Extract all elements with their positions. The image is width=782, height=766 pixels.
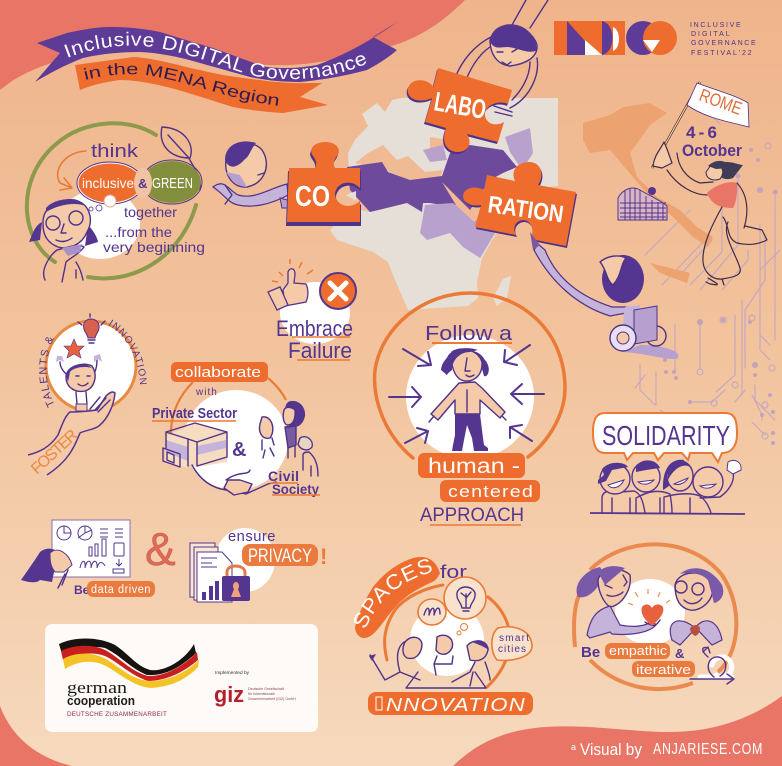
event dates — [682, 123, 742, 160]
icon: documents with bar chart — [190, 543, 232, 602]
event dates: 4-6 — [686, 123, 717, 142]
bubble: smart cities — [492, 627, 532, 660]
credit line: a — [571, 742, 576, 752]
label: iterative: iterative — [636, 663, 691, 677]
venn: green — [142, 160, 202, 204]
label: human-: human - — [428, 455, 520, 478]
person — [429, 348, 506, 451]
text: Failure: Failure — [288, 338, 352, 363]
icon: leaf — [161, 127, 200, 190]
puzzle piece: LABO — [407, 68, 512, 154]
Rome marker — [648, 187, 656, 195]
text: ensure: ensure — [228, 528, 276, 545]
label: data driven: data driven — [91, 584, 151, 596]
label: privacy: PRIVACY — [248, 546, 312, 567]
right person with glasses — [670, 568, 723, 645]
orange ring — [574, 544, 736, 689]
thought bubbles — [89, 195, 116, 211]
coral corner: bottom left — [0, 706, 72, 766]
venn: green: GREEN — [152, 175, 193, 192]
orange ring — [375, 293, 565, 458]
white blob — [615, 579, 685, 645]
giz logo: giz — [214, 682, 244, 707]
white blob — [406, 335, 534, 459]
icon: thumbs up — [268, 259, 313, 310]
speech bubble: SOLIDARITY — [602, 420, 730, 451]
character with raised arms — [56, 354, 102, 411]
speech bubble — [593, 413, 737, 462]
Rome event callout — [618, 82, 767, 285]
text: ampersand: & — [232, 439, 246, 461]
german flag ribbon — [59, 638, 199, 688]
bubble: smart cities: cities — [498, 644, 526, 655]
event dates: October — [682, 141, 742, 160]
title banner — [35, 22, 397, 113]
woman carrying the flag — [653, 142, 767, 285]
dashboard board — [52, 520, 130, 577]
puzzle collaboration — [213, 0, 678, 359]
character with glasses — [29, 199, 98, 282]
be data driven section — [21, 520, 327, 602]
text: Embrace: Embrace — [276, 316, 353, 341]
circuit board pattern — [635, 94, 780, 445]
icon: handshake — [192, 465, 276, 495]
think inclusive and green section — [27, 123, 205, 282]
text: civil society — [268, 468, 320, 497]
person holding LABO piece — [455, 0, 548, 116]
text: foster: FOSTER — [28, 426, 82, 478]
orange ring with white fill — [46, 321, 136, 411]
text: follow a: Follow a — [425, 323, 513, 345]
person pushing CO piece — [213, 141, 298, 208]
logo text: DIGITAL — [691, 31, 731, 38]
banner: orange lower ribbon — [75, 57, 328, 113]
label: centered: centered — [448, 482, 534, 501]
icon: iteration loop arrow — [690, 647, 734, 684]
arrow from think — [58, 151, 86, 190]
green circle — [27, 123, 196, 278]
map of Italy — [583, 103, 713, 283]
label: collaborate: collaborate — [175, 364, 261, 381]
logo text — [690, 22, 757, 57]
puzzle piece: RATION — [463, 162, 577, 248]
Follow a human-centered approach — [375, 293, 565, 526]
partner logos card — [45, 624, 318, 732]
text: talents and: TALENTS & — [39, 337, 54, 408]
text: private sector: Private Sector — [152, 405, 237, 422]
label: iterative — [632, 661, 695, 677]
coral corner: top left — [0, 0, 465, 90]
label: collaborate — [171, 362, 268, 382]
venn: inclusive: inclusive — [82, 175, 134, 191]
coral corner: bottom right — [453, 696, 782, 766]
group of four people — [598, 460, 741, 513]
banner: purple upper ribbon — [35, 22, 397, 82]
giz full name: für Internationale — [248, 692, 275, 696]
giz full name: Zusammenarbeit (GIZ) GmbH — [248, 697, 296, 701]
white blob — [280, 282, 350, 344]
icon: Colosseum — [618, 188, 667, 220]
civil society people — [259, 401, 318, 476]
icon: padlock — [222, 566, 250, 601]
credit line: Visual by — [580, 740, 642, 759]
puzzle piece: LABO: LABO — [432, 86, 488, 125]
person in purple — [21, 549, 72, 588]
bubble: smart cities: smart — [499, 633, 529, 644]
label: centered — [440, 480, 540, 502]
label: empathic: empathic — [609, 644, 667, 658]
Embrace Failure section — [268, 259, 356, 363]
label: empathic — [605, 643, 670, 659]
puzzle piece: RATION: RATION — [486, 191, 565, 229]
label: spaces: SPACES — [354, 559, 432, 628]
credit line — [571, 740, 763, 759]
text: innovation: INNOVATION — [108, 320, 147, 384]
text: be: Be — [74, 583, 90, 597]
bubble: lightbulb — [444, 577, 486, 635]
giz full name: Deutsche Gesellschaft — [248, 687, 284, 691]
open hand — [28, 392, 115, 475]
icon: star — [64, 339, 84, 358]
label: innovation: NNOVATION — [386, 695, 526, 715]
white blob — [60, 189, 140, 259]
connecting arcs — [171, 378, 286, 450]
bubble: scribble — [418, 599, 446, 625]
giz full name — [248, 687, 296, 701]
venn: ampersand: & — [138, 176, 147, 191]
text: for: for — [440, 562, 467, 582]
text: civil society: Society — [272, 481, 319, 497]
INDIGO logo — [554, 21, 757, 57]
logo text: FESTIVAL'22 — [691, 50, 753, 57]
label: human- — [418, 453, 525, 478]
wheelchair user reaching for RATION piece — [530, 232, 678, 359]
text: approach: APPROACH — [420, 505, 524, 526]
subtitle text: in the MENA Region — [84, 63, 278, 106]
venn: ampersand — [134, 168, 152, 198]
flag with ROME — [652, 82, 749, 168]
icon: building — [163, 423, 227, 468]
flag with ROME: ROME — [697, 85, 745, 119]
logo mark — [554, 21, 677, 55]
puzzle piece: CO: CO — [295, 181, 330, 213]
text: civil society: Civil — [268, 468, 299, 484]
text: very beginning: very beginning — [103, 239, 205, 255]
text: ampersand: & — [675, 646, 684, 661]
label: innovation — [368, 692, 533, 715]
be empathic and iterative section — [574, 544, 736, 689]
title text: Inclusive DIGITAL Governance — [64, 32, 366, 80]
icon: cross in a circle — [320, 273, 356, 309]
Solidarity section — [590, 413, 745, 514]
logo text: GOVERNANCE — [691, 40, 757, 47]
puzzle piece: CO — [286, 142, 361, 226]
white blob — [410, 604, 484, 676]
Foster talents and innovation — [28, 313, 147, 478]
logo text: INCLUSIVE — [690, 22, 742, 29]
text: from the: ...from the — [105, 224, 172, 240]
text: be: Be — [581, 644, 600, 661]
inward arrows — [389, 345, 544, 443]
text: german: german — [67, 678, 128, 697]
white blob — [215, 528, 275, 592]
collaborate with section — [152, 362, 320, 497]
text: implemented by: Implemented by — [215, 670, 250, 676]
left person offering a heart — [577, 566, 660, 638]
icon: ampersand: & — [145, 523, 176, 575]
text: together: together — [124, 204, 177, 220]
white blob — [184, 390, 288, 490]
orange ring — [385, 585, 510, 687]
text: cooperation: cooperation — [67, 694, 135, 708]
icon: heart — [628, 589, 670, 626]
exclamation mark: ! — [320, 544, 327, 569]
three collaborators at a table — [369, 635, 490, 688]
spaces for innovation section — [354, 557, 533, 715]
icon: light bulb — [78, 314, 105, 343]
text: Deutsche Zusammenarbeit: DEUTSCHE ZUSAMMENARBEIT — [67, 711, 167, 718]
text: with: with — [195, 387, 218, 398]
text: think: think — [91, 141, 139, 161]
world map: Europe, Middle East and Africa — [330, 98, 558, 310]
venn: inclusive — [77, 162, 143, 204]
